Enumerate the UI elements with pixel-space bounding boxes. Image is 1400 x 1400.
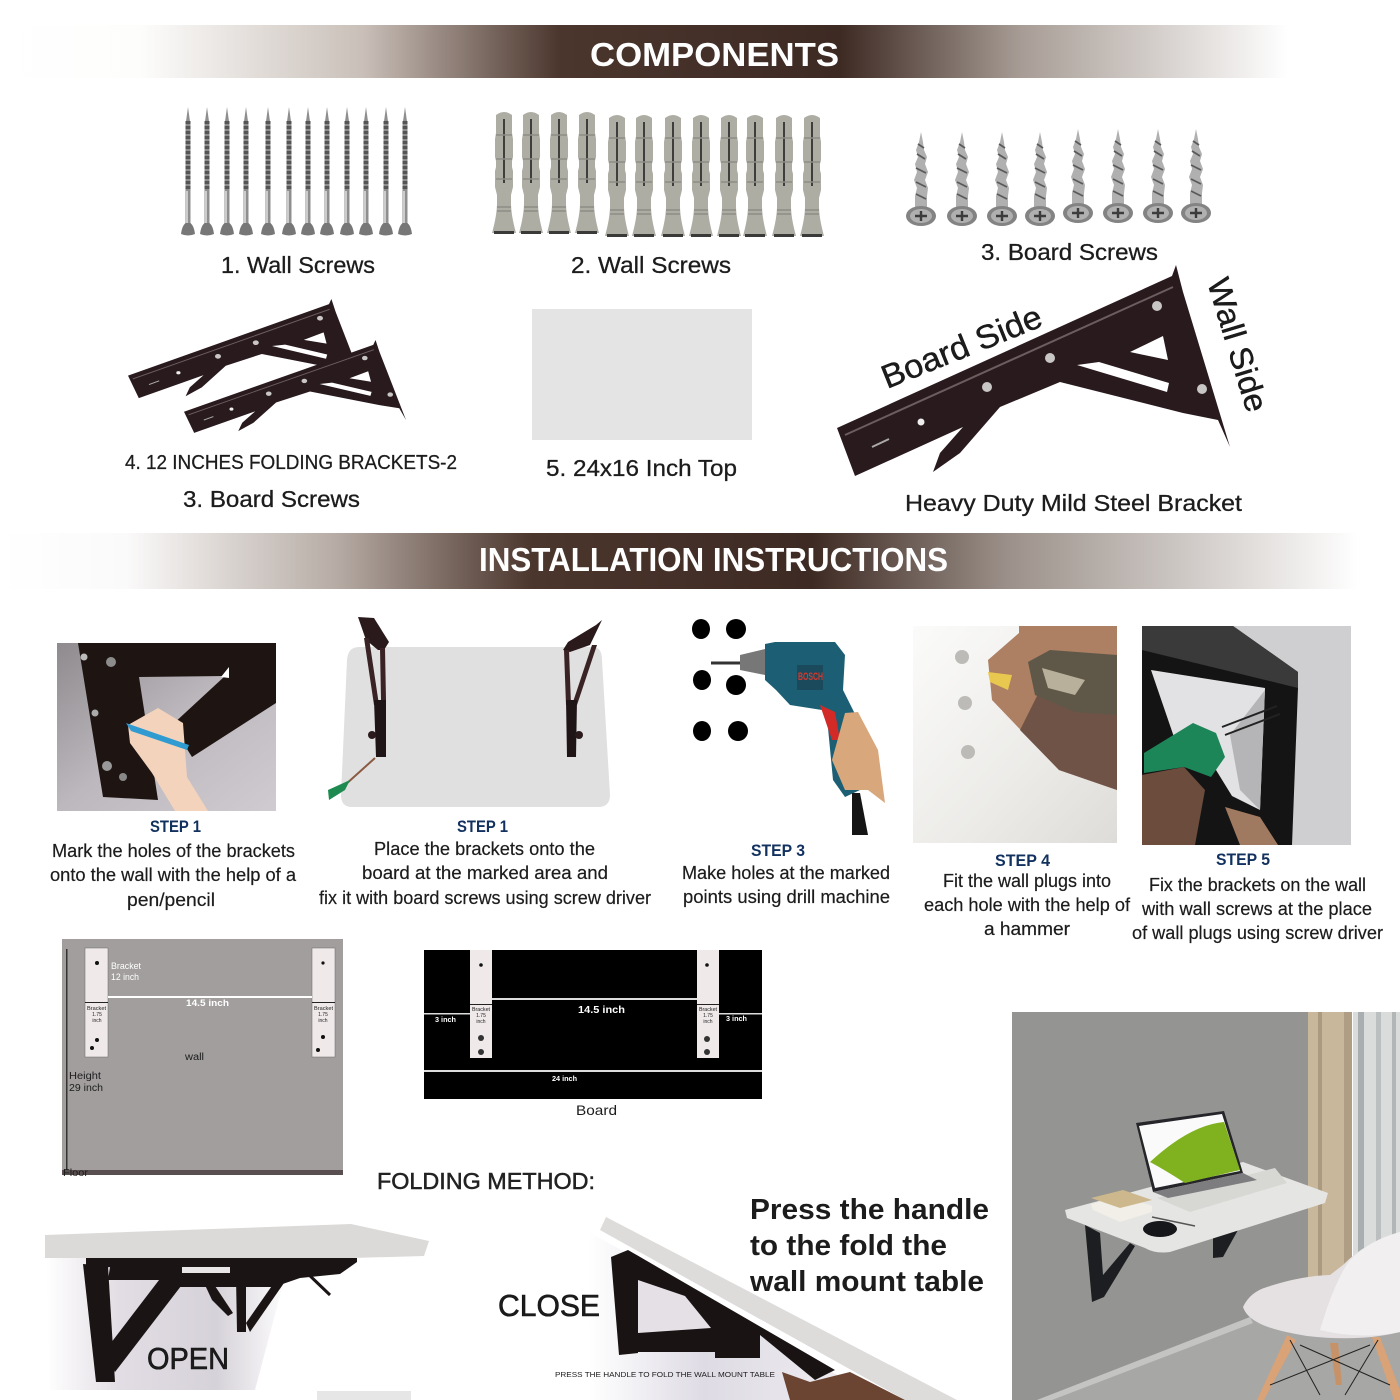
label: right bracket unit: inch [703,1019,713,1025]
label: right bracket value: 1.75 [318,1012,328,1018]
label: bracket 12 inch value: 12 inch [111,972,139,983]
table brackets [1085,1225,1238,1302]
step text: pen/pencil [127,890,215,910]
group: table top [532,309,752,481]
text: press the handle line 1: Press the handle [750,1194,989,1226]
label: wall: wall [184,1052,204,1063]
table top [1065,1162,1328,1252]
step 1: mark holes [50,643,297,910]
label: press the handle small: PRESS THE HANDLE TO FOLD THE WALL MOUNT TABLE [555,1370,775,1379]
chair [1243,1232,1400,1400]
label: board screws: 3. Board Screws [981,239,1158,265]
step 5: fix brackets [1132,626,1383,943]
text: press the handle line 3: wall mount table [749,1266,984,1298]
group: board screws [906,129,1211,265]
label: right bracket value: 1.75 [703,1013,713,1019]
photo: closed table [498,1194,989,1400]
group: wall plugs [492,112,824,278]
label: right bracket width: Bracket [314,1006,334,1012]
label: 14.5 inch: 14.5 inch [578,1004,625,1016]
label: left bracket unit: inch [92,1018,102,1024]
label: board side: Board Side [876,298,1047,395]
step label: STEP 4 [995,851,1051,870]
label: wall screws 1: 1. Wall Screws [221,252,375,278]
label: folding brackets: 4. 12 INCHES FOLDING BRACKETS-2 [125,452,457,474]
photo: table in room [1012,1012,1400,1400]
step text: onto the wall with the help of a [50,865,297,885]
label: wall side: Wall Side [1200,274,1275,416]
diagram: board measurements [424,950,762,1118]
label: left bracket value: 1.75 [476,1013,486,1019]
heading: components: COMPONENTS [590,36,839,73]
step label: STEP 5 [1216,850,1270,869]
step text: Make holes at the marked [682,863,890,883]
label: right 3 inch: 3 inch [726,1014,747,1023]
label: bracket 12 inch: Bracket [111,961,141,972]
fragment: gray block at bottom [317,1391,411,1400]
label: left bracket unit: inch [476,1019,486,1025]
text: press the handle line 2: to the fold the [750,1230,947,1262]
step text: Place the brackets onto the [374,839,595,859]
group: folding brackets [125,299,457,512]
label: right bracket width: Bracket [699,1007,718,1013]
step label: STEP 3 [751,841,805,860]
label: close: CLOSE [498,1288,600,1323]
step label: STEP 1 [150,817,201,836]
label: height: Height [69,1070,101,1082]
photo: open table [45,1224,429,1390]
label: open: OPEN [147,1341,229,1376]
step text: of wall plugs using screw driver [1132,923,1383,943]
heading: folding method: FOLDING METHOD: [377,1168,595,1194]
label: bracket caption: Heavy Duty Mild Steel Bracket [905,490,1243,516]
step 1: place brackets on board [319,617,651,908]
books [1091,1190,1152,1222]
step text: a hammer [984,919,1070,939]
group: heavy duty bracket [837,265,1275,516]
caption: board: Board [576,1102,617,1118]
banner: installation instructions [0,533,1400,589]
step text: board at the marked area and [362,863,608,883]
label: right bracket unit: inch [318,1018,328,1024]
label: 14.5 inch: 14.5 inch [186,998,229,1009]
laptop [1136,1111,1287,1212]
label: floor: Floor [63,1167,89,1179]
step text: each hole with the help of [924,895,1131,915]
step text: Fit the wall plugs into [943,871,1111,891]
label: 24 inch: 24 inch [552,1076,577,1083]
label: left bracket width: Bracket [472,1007,491,1013]
step text: with wall screws at the place [1141,899,1372,919]
label: left bracket value: 1.75 [92,1012,102,1018]
label: wall screws 2: 2. Wall Screws [571,252,731,278]
diagram: wall measurements [62,939,343,1179]
step 4: wall plugs [913,626,1131,939]
banner: components [0,25,1400,78]
label: left bracket width: Bracket [87,1006,107,1012]
mouse [1143,1217,1195,1237]
step text: points using drill machine [683,887,890,907]
step 3: drill holes: BOSCH [798,671,823,683]
group: wall screws [181,107,412,278]
step text: fix it with board screws using screw driver [319,888,651,908]
step label: STEP 1 [457,817,508,836]
label: left 3 inch: 3 inch [435,1015,456,1024]
step text: Fix the brackets on the wall [1149,875,1366,895]
label: height value: 29 inch [69,1082,103,1094]
label: board screws second: 3. Board Screws [183,486,360,512]
heading: installation instructions: INSTALLATION INSTRUCTIONS [479,541,948,578]
step text: Mark the holes of the brackets [52,841,295,861]
step 3: drill holes [682,619,890,907]
label: top size: 5. 24x16 Inch Top [546,455,737,481]
